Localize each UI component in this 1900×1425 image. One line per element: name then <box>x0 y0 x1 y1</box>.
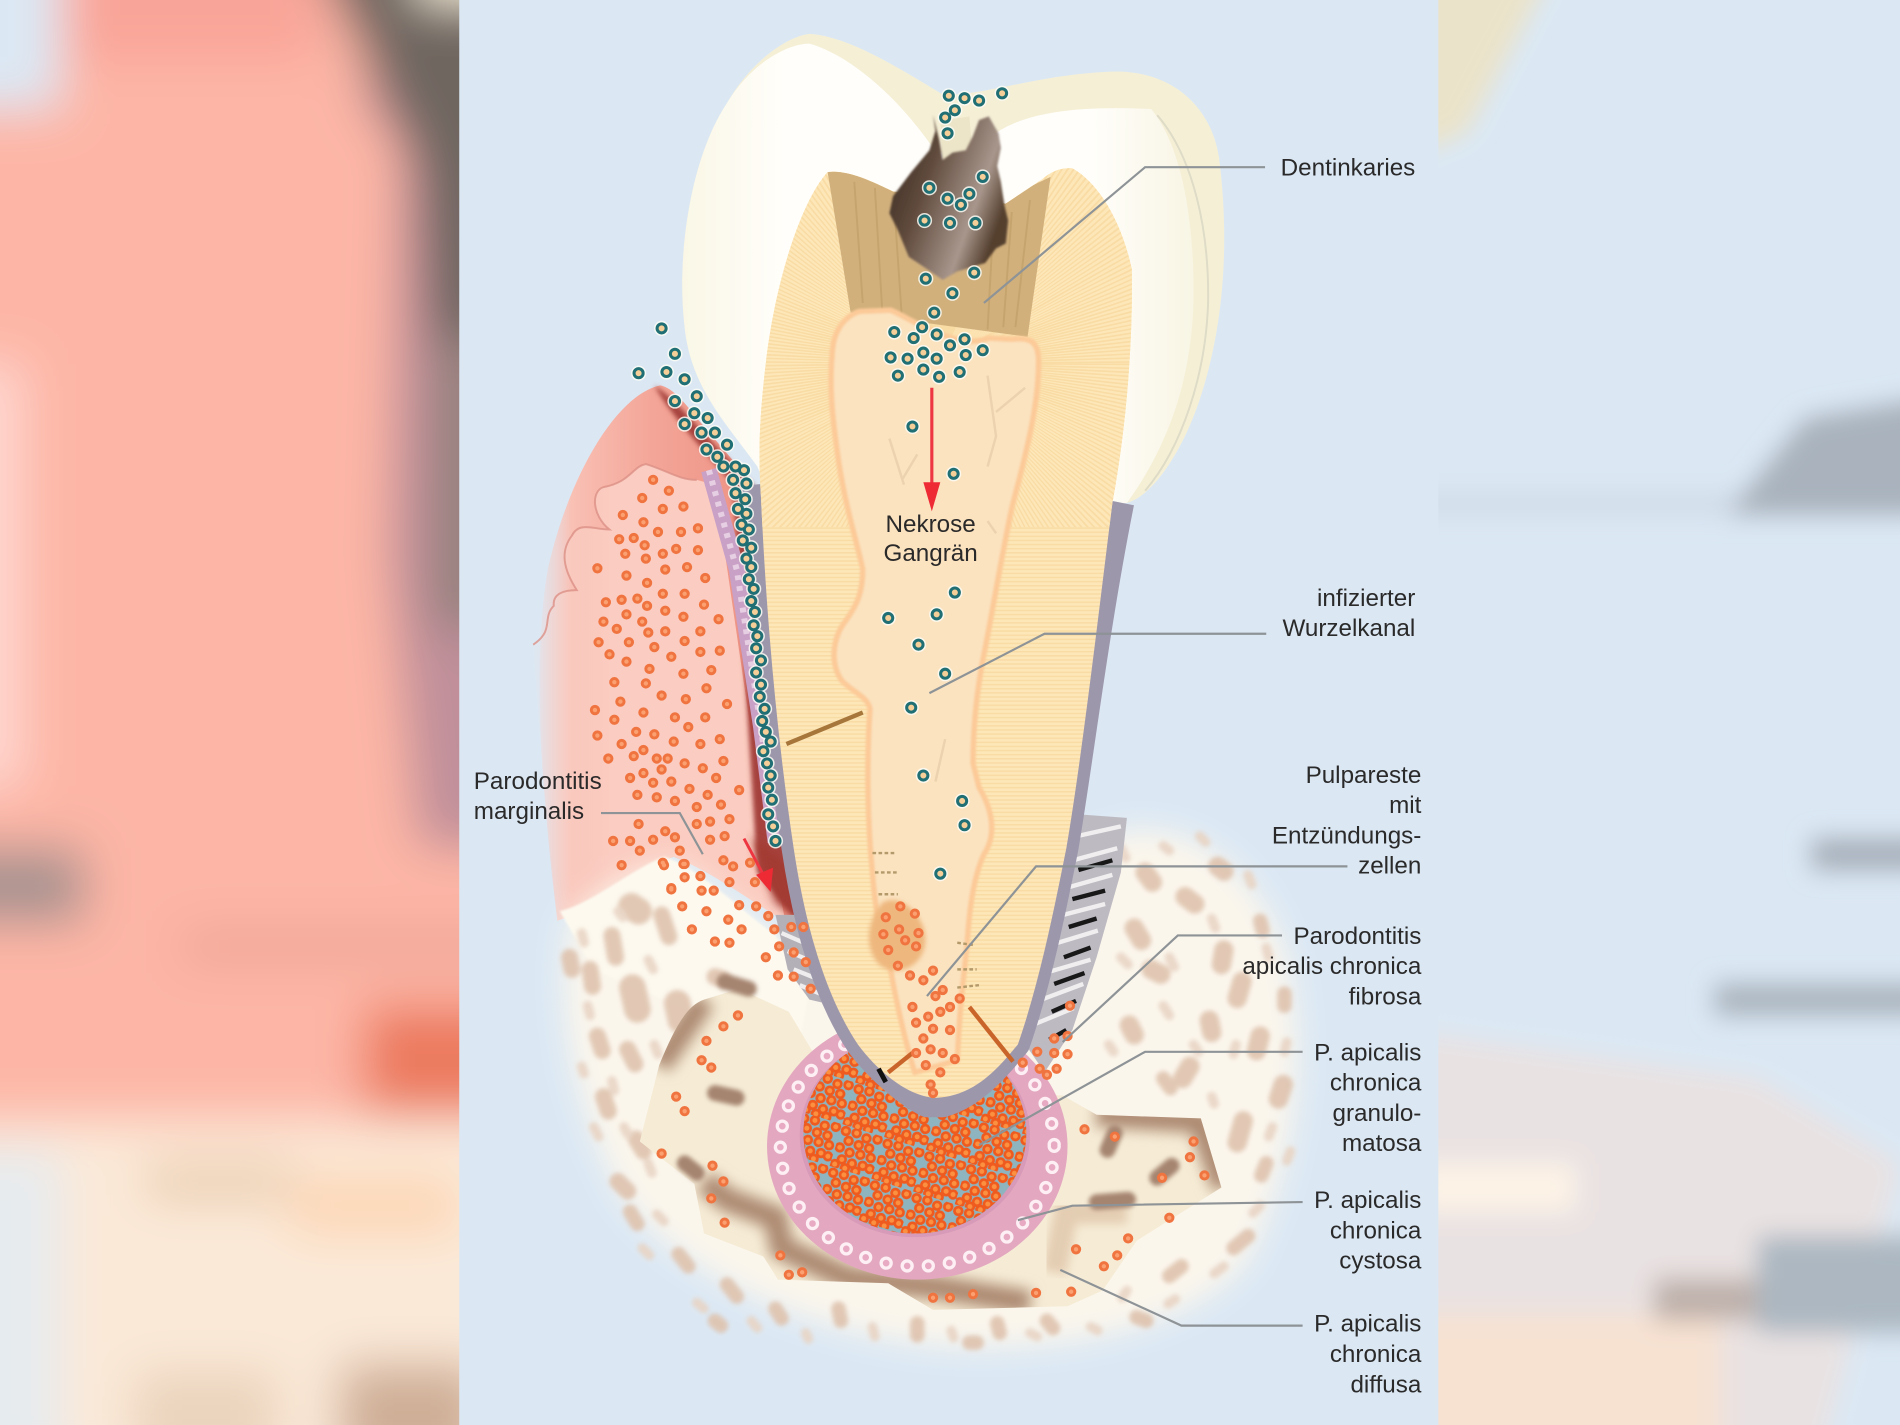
cyst epithelium cell ring <box>780 1026 1054 1266</box>
label: Parodontitis apicalis chronica fibrosa: Parodontitis <box>1293 923 1421 950</box>
label: Pulpareste mit Entzündungszellen: Pulpareste <box>1306 762 1421 789</box>
label: Nekrose Gangrän: Gangrän <box>883 540 978 567</box>
label: P. apicalis chronica diffusa: diffusa <box>1350 1371 1422 1398</box>
label: Parodontitis marginalis: Parodontitis <box>474 768 602 795</box>
label: P. apicalis chronica granulomatosa <box>979 1039 1422 1157</box>
caries lesion <box>889 115 1008 280</box>
label: P. apicalis chronica diffusa: chronica <box>1330 1341 1422 1368</box>
label: P. apicalis chronica cystosa <box>1018 1187 1422 1275</box>
crown back layer <box>682 34 1224 509</box>
label: Parodontitis marginalis <box>474 768 703 854</box>
pulp vessels <box>889 376 1025 782</box>
label: Dentinkaries: Dentinkaries <box>1281 155 1415 182</box>
label: Nekrose Gangrän <box>883 511 978 567</box>
label: Parodontitis apicalis chronica fibrosa <box>1063 923 1422 1042</box>
root surface cementum <box>754 485 1122 1105</box>
crown enamel front <box>682 44 1194 509</box>
panel: blurred left side <box>0 0 460 1425</box>
pulp tan patch <box>869 900 925 970</box>
label: P. apicalis chronica granulomatosa: matosa <box>1342 1130 1422 1157</box>
epithelium stripe <box>709 470 776 842</box>
panel: blurred right side <box>1393 0 1900 1425</box>
label: Dentinkaries <box>984 155 1415 303</box>
carious dentin <box>828 170 1051 337</box>
label: Pulpareste mit Entzündungszellen: Entzündungs- <box>1272 822 1421 849</box>
granulation tissue dots <box>803 1032 1026 1234</box>
label: P. apicalis chronica granulomatosa: chronica <box>1330 1070 1422 1097</box>
bone: upper crest <box>560 857 809 1042</box>
label: P. apicalis chronica diffusa: P. apicalis <box>1314 1311 1421 1338</box>
label: infizierter Wurzelkanal: infizierter <box>1317 585 1415 612</box>
gum: gingiva <box>533 385 800 927</box>
granuloma and cyst <box>767 1013 1068 1280</box>
pulp chamber and canal <box>831 310 1039 1072</box>
label: P. apicalis chronica granulomatosa: granulo- <box>1333 1100 1421 1127</box>
label: Parodontitis apicalis chronica fibrosa: fibrosa <box>1349 984 1422 1011</box>
arrow: pulp necrosis direction <box>923 388 940 511</box>
label: Pulpareste mit Entzündungszellen: zellen <box>1358 853 1421 880</box>
gum: inner connective tissue <box>533 464 785 921</box>
label: Nekrose Gangrän: Nekrose <box>886 511 976 538</box>
label: Parodontitis apicalis chronica fibrosa: apicalis chronica <box>1242 953 1422 980</box>
fracture line <box>786 712 863 744</box>
label: P. apicalis chronica cystosa: P. apicalis <box>1314 1187 1421 1214</box>
gum: dark marginal pocket and epithelium <box>654 385 802 923</box>
label: P. apicalis chronica granulomatosa: P. apicalis <box>1314 1039 1421 1066</box>
bone: lesion resorption zone <box>640 989 1221 1310</box>
label: P. apicalis chronica cystosa: chronica <box>1330 1217 1422 1244</box>
enamel notch <box>940 116 972 162</box>
dentin <box>760 168 1132 1098</box>
periodontal ligament fibres <box>776 814 1127 1072</box>
label: Pulpareste mit Entzündungszellen: mit <box>1389 792 1422 819</box>
bone: trabecular holes <box>570 836 1290 1343</box>
label: infizierter Wurzelkanal <box>929 585 1415 693</box>
apical inflamed lines <box>888 1007 1013 1072</box>
bacteria dots <box>639 93 1002 874</box>
inflammatory cells <box>595 480 1204 1298</box>
label: Pulpareste mit Entzündungszellen <box>927 762 1422 996</box>
label: P. apicalis chronica cystosa: cystosa <box>1339 1248 1422 1275</box>
label: infizierter Wurzelkanal: Wurzelkanal <box>1282 615 1415 642</box>
arrow: marginal progression <box>744 839 773 892</box>
tooth <box>682 34 1224 1105</box>
label: P. apicalis chronica diffusa <box>1060 1270 1422 1398</box>
bone: cancellous alveolar bone <box>560 830 1297 1348</box>
label: Parodontitis marginalis: marginalis <box>474 798 584 825</box>
